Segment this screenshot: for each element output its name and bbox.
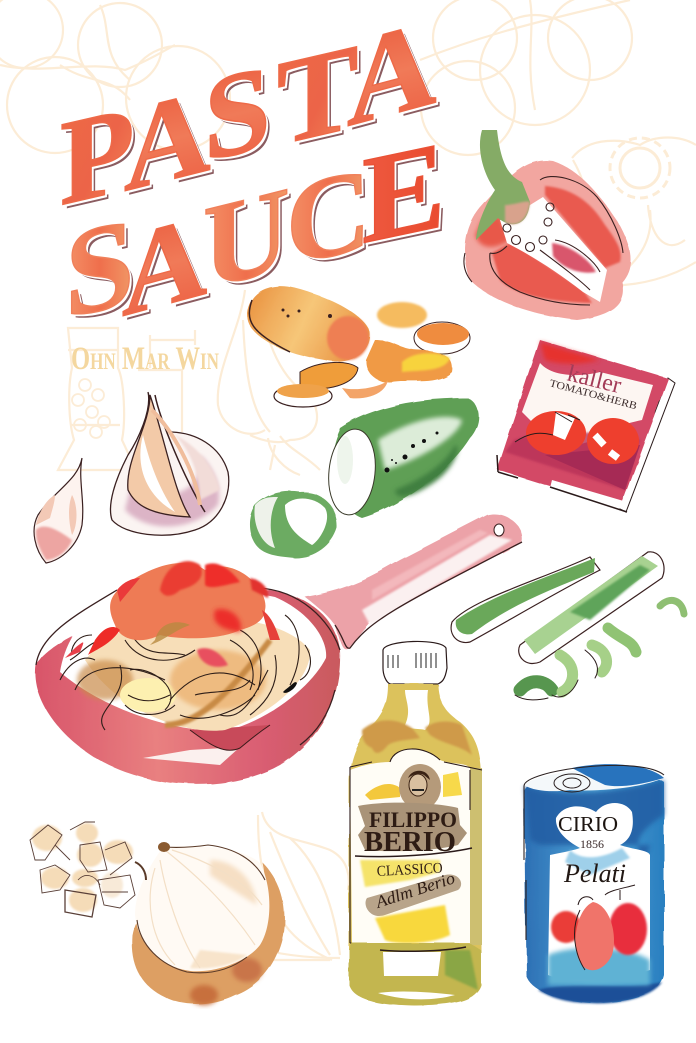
title: SAUCE: C xyxy=(288,144,373,293)
icon: Cirio pelati can xyxy=(524,764,664,1003)
brand text: CIRIO xyxy=(558,812,618,836)
title: SAUCE: U xyxy=(207,165,294,320)
title: PASTA: P xyxy=(64,83,139,236)
title: PASTA: T xyxy=(279,20,360,174)
celery curls xyxy=(515,600,684,700)
title: SAUCE: E xyxy=(364,117,447,273)
icon: sliced carrot xyxy=(247,286,470,407)
title: PASTA: P xyxy=(62,81,137,234)
icon: frying pan with pasta xyxy=(35,514,522,784)
label banner xyxy=(358,803,467,851)
pasta xyxy=(60,615,310,731)
signature text: Adlm Berio xyxy=(372,868,457,912)
title: PASTA: A xyxy=(124,63,211,218)
title: SAUCE: U xyxy=(205,163,292,318)
icon: onion half xyxy=(132,842,284,1005)
tomatoes on can xyxy=(551,885,647,970)
icon: tomato and herb box xyxy=(497,340,675,512)
title: PASTA: S xyxy=(206,42,273,190)
icon: olive oil bottle xyxy=(349,641,482,1006)
title: SAUCE: E xyxy=(366,119,449,275)
title: SAUCE: S xyxy=(67,193,137,348)
title: SAUCE: U xyxy=(203,161,290,316)
title: SAUCE: S xyxy=(69,195,139,350)
title: PASTA: T xyxy=(277,18,358,172)
pan handle xyxy=(305,514,522,649)
title: PASTA: A xyxy=(128,67,215,222)
icon: celery sticks xyxy=(451,552,684,700)
year: 1856 xyxy=(580,837,604,851)
icon: olive oil bottle: BERIO xyxy=(364,826,456,858)
title: SAUCE: S xyxy=(65,191,135,346)
title: PASTA: A xyxy=(126,65,213,220)
icon: chopped onion pieces xyxy=(30,822,135,917)
title: PASTA: T xyxy=(281,22,362,176)
pan body xyxy=(35,590,340,784)
title: PASTA: S xyxy=(204,40,271,188)
product text: Pelati xyxy=(563,859,626,888)
box brand text: kaller xyxy=(565,361,624,399)
title: PASTA: S xyxy=(208,44,275,192)
author credit: Ohn Mar Win xyxy=(71,341,219,377)
title: SAUCE: A xyxy=(126,192,211,346)
title: PASTA: P xyxy=(60,79,135,232)
icon: red bell pepper xyxy=(464,130,631,320)
title: PASTA xyxy=(60,0,441,236)
icon: zucchini xyxy=(249,398,479,558)
icon: garlic clove xyxy=(34,458,83,563)
icon: garlic bulb xyxy=(110,392,229,535)
title: SAUCE xyxy=(65,115,449,350)
title: SAUCE: E xyxy=(362,115,445,271)
title: SAUCE: A xyxy=(122,188,207,342)
title: SAUCE: C xyxy=(290,146,375,295)
classico text: CLASSICO xyxy=(376,861,443,880)
box product text: TOMATO&HERB xyxy=(548,378,638,412)
title: PASTA: A xyxy=(351,0,441,158)
title: SAUCE: A xyxy=(124,190,209,344)
label portrait xyxy=(365,764,462,810)
tomato sauce xyxy=(65,561,280,667)
title: SAUCE: C xyxy=(286,142,371,291)
brand text: FILIPPO xyxy=(369,807,457,832)
